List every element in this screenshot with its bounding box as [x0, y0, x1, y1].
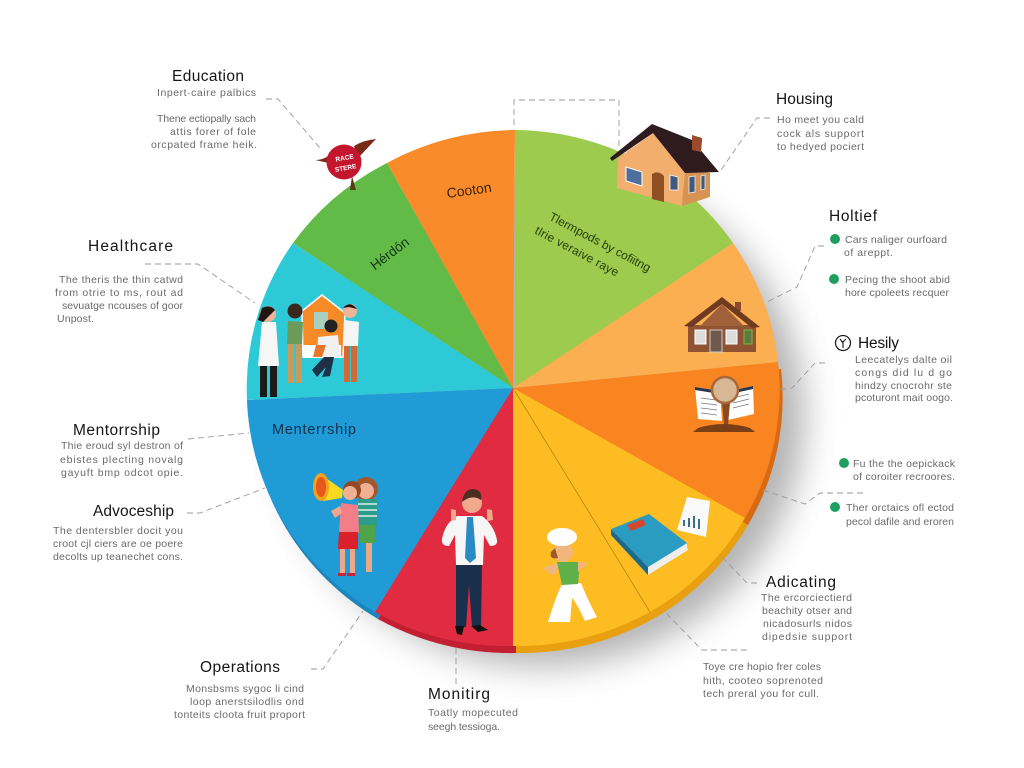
label: checklist notes: Fu the the oepickack — [853, 458, 956, 470]
label: Education: Thene ectiopally sach — [157, 113, 256, 125]
slice: toye — [513, 388, 650, 646]
label: Housing: to hedyed pociert — [777, 141, 864, 153]
slice: healthcare — [247, 243, 513, 400]
slice label: green text: tlrie veraive raye — [533, 223, 622, 279]
label: Operations: Operations — [200, 659, 280, 676]
icon: brown cabin — [684, 297, 760, 352]
label: Holtief — [829, 208, 950, 299]
slice label: Herdon: Hérdón — [368, 234, 412, 273]
slice label: Menterrship: Menterrship — [272, 422, 356, 438]
icon: documents and magnifier — [693, 377, 755, 432]
label: Mentorrship: gayuft bmp odcot opie. — [61, 467, 183, 479]
slice: adicating — [513, 388, 745, 612]
icon: megaphone kids — [313, 473, 378, 576]
label: Holtief: Holtief — [829, 208, 878, 225]
icon: red badge: RACE — [335, 153, 355, 164]
label: Advoceship: decolts up teanechet cons. — [53, 551, 183, 563]
label: Education: Inpert·caire palbics — [157, 87, 256, 99]
icon: green check 2 — [829, 274, 839, 284]
label: Healthcare: sevuatge ncouses of goor — [62, 300, 184, 312]
icon: house on slice — [610, 124, 719, 206]
label: Advoceship — [53, 503, 183, 563]
label: Housing: Ho meet you cald — [777, 114, 864, 126]
label: Advoceship: croot cjl ciers are oe poere — [53, 538, 183, 550]
label: Healthcare — [55, 238, 184, 325]
label: Mentorrship: ebistes plecting novalg — [60, 454, 183, 466]
label: Operations — [174, 659, 305, 721]
label: checklist notes: of coroiter recroores. — [853, 471, 955, 483]
label: Hesily: pcoturont mait oogo. — [855, 392, 953, 404]
label: Education — [151, 68, 257, 151]
label: Toye: tech preral you for cull. — [703, 688, 819, 700]
label: Mentorrship — [60, 422, 183, 479]
label: Adicating: Adicating — [766, 574, 836, 591]
label: Monitirg: seegh tessioga. — [428, 721, 500, 733]
pie chart — [247, 130, 783, 653]
label: Adicating: The ercorciectierd — [761, 592, 852, 604]
label: Healthcare: Healthcare — [88, 238, 173, 255]
pie rim — [250, 369, 783, 653]
connectors — [145, 99, 863, 687]
slice: holtief — [513, 243, 778, 388]
label: Housing — [776, 91, 864, 153]
slice label: green text: Tlermpods by cofiitng — [547, 209, 653, 275]
label: Operations: tonteits cloota fruit proport — [174, 709, 305, 721]
icon: green check 1 — [830, 234, 840, 244]
slice: heroin — [293, 163, 513, 388]
label: Advoceship: Advoceship — [93, 503, 174, 520]
label: Hesily: hindzy cnocrohr ste — [855, 380, 952, 392]
label: Adicating: nicadosurls nidos — [763, 618, 852, 630]
label: Advoceship: The dentersbler docit you — [53, 525, 183, 537]
label: Holtief: hore cpoleets recquer — [845, 287, 950, 299]
icon: red badge — [315, 139, 376, 190]
label: Monitirg — [428, 686, 518, 733]
label: checklist notes: Ther orctaics ofl ectod — [846, 502, 954, 514]
label: Education: attis forer of fole — [170, 126, 256, 138]
label: Hesily: Hesily — [858, 335, 899, 352]
label: Healthcare: Unpost. — [57, 313, 94, 325]
label: Toye: hith, cooteo soprenoted — [703, 675, 823, 687]
icon: green check 4 — [830, 502, 840, 512]
label: Education: Education — [172, 68, 244, 85]
slice: housing — [515, 130, 733, 388]
label: Toye: Toye cre hopio frer coles — [703, 661, 821, 673]
slice label: Cooton: Cooton — [446, 179, 492, 201]
label: checklist notes — [830, 458, 956, 528]
slice: monitoring — [375, 388, 513, 646]
label: Monitirg: Toatly mopecuted — [428, 707, 518, 719]
label: Adicating: dipedsie support — [762, 631, 852, 643]
slice: mentorship — [247, 388, 513, 612]
label: Housing: Housing — [776, 91, 833, 108]
label: Housing: cock als support — [777, 128, 864, 140]
icon: chef figure — [542, 528, 597, 622]
icon: healthcare group — [258, 295, 359, 397]
label: Adicating: beachity otser and — [762, 605, 852, 617]
label: Hesily — [836, 335, 953, 404]
slice: hesily — [513, 362, 780, 518]
slice: Cooton — [387, 130, 515, 388]
icon: man in shirt and tie — [442, 489, 497, 635]
label: Hesily: Leecatelys dalte oil — [855, 354, 952, 366]
label: Holtief: of areppt. — [844, 247, 893, 259]
label: Mentorrship: Mentorrship — [73, 422, 160, 439]
label: Toye — [703, 661, 823, 700]
label: Operations: loop anerstsilodlis ond — [190, 696, 304, 708]
label: Holtief: Pecing the shoot abid — [845, 274, 950, 286]
slice label: green text — [533, 207, 653, 292]
label: Hesily: congs did lu d go — [855, 367, 952, 379]
icon: tree circle — [836, 336, 850, 350]
label: Monitirg: Monitirg — [428, 686, 490, 703]
label: Mentorrship: Thie eroud syl destron of — [61, 440, 183, 452]
label: Healthcare: from otrie to ms, rout ad — [55, 287, 183, 299]
label: Healthcare: The theris the thin catwd — [59, 274, 183, 286]
icon: green check 3 — [839, 458, 849, 468]
label: Holtief: Cars naliger ourfoard — [845, 234, 947, 246]
icon: book and chart paper — [611, 497, 710, 575]
pie shadow — [280, 166, 804, 666]
label: Adicating — [761, 574, 852, 643]
label: Operations: Monsbsms sygoc li cind — [186, 683, 304, 695]
label: Education: orcpated frame heik. — [151, 139, 257, 151]
icon: red badge: STERE — [334, 163, 358, 174]
label: checklist notes: pecol dafile and eroren — [846, 516, 954, 528]
